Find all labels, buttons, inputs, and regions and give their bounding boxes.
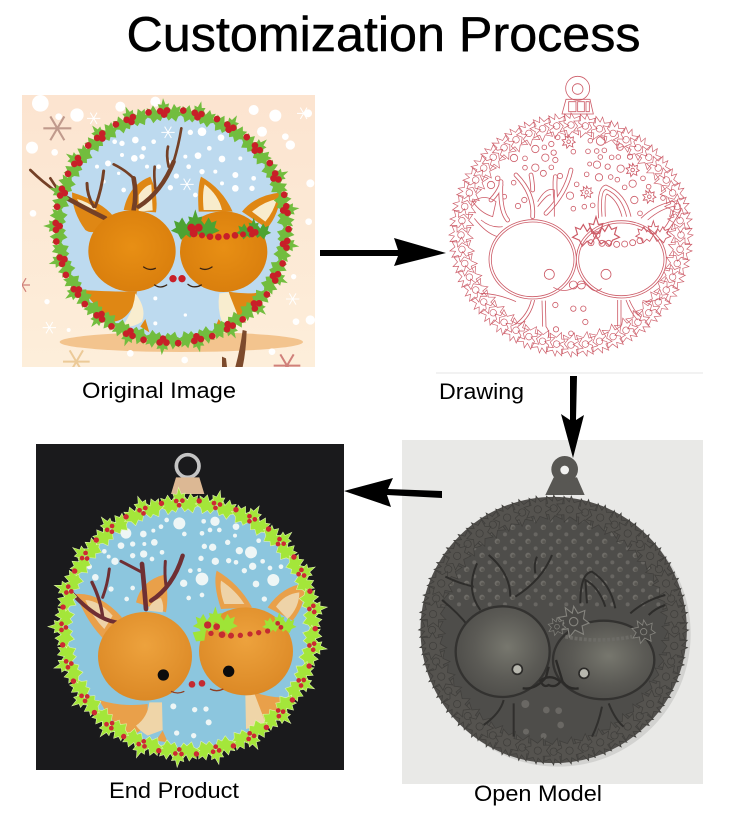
- right head: [553, 621, 654, 699]
- disc: [59, 113, 285, 340]
- cap and loop: [545, 456, 585, 495]
- lower body dots: [521, 700, 564, 739]
- left deer ears: [76, 575, 167, 638]
- snowflakes: [121, 517, 279, 586]
- snow dots: [26, 95, 315, 363]
- right deer ears: [215, 571, 305, 621]
- label: original image: Original Image: [82, 378, 236, 403]
- antlers: [73, 556, 183, 622]
- disc: [425, 502, 682, 758]
- shadow: [425, 501, 691, 767]
- left deer body: [99, 700, 168, 742]
- snowflake red: [14, 278, 300, 377]
- head wreath: [171, 209, 271, 240]
- noses: [169, 275, 186, 282]
- noses and smiles: [171, 680, 223, 693]
- title: Customization Process: [126, 8, 640, 62]
- legs: [484, 700, 624, 737]
- arrow: original to drawing: [320, 238, 446, 266]
- panel: drawing: [434, 76, 708, 372]
- snowflake decor: [43, 116, 71, 140]
- antlers: [491, 170, 571, 220]
- eyes: [512, 664, 589, 678]
- snowflakes: [43, 108, 310, 333]
- right deer ears: [198, 177, 281, 228]
- eyes: [158, 666, 234, 681]
- divider under drawing: [436, 372, 703, 374]
- beads: [565, 637, 632, 640]
- deer faces: [144, 267, 212, 287]
- head holly and beads: [193, 606, 297, 641]
- relief dots: [442, 519, 660, 606]
- label: open model: Open Model: [474, 781, 602, 806]
- wreath: [402, 478, 705, 782]
- ornament cap: [562, 76, 593, 114]
- noses: [523, 660, 579, 689]
- wreath ring: [48, 486, 330, 769]
- right deer body: [216, 292, 256, 324]
- label: drawing: Drawing: [439, 379, 524, 404]
- tail: [222, 330, 247, 367]
- wreath ring: [43, 97, 302, 357]
- arrow: drawing to open model: [561, 376, 584, 458]
- left head: [456, 606, 550, 697]
- noses: [553, 281, 602, 291]
- small flakes: [562, 135, 656, 203]
- panel: end product photo: [36, 444, 344, 770]
- left deer body: [84, 290, 149, 332]
- loop and cap: [171, 455, 204, 494]
- snow circles: [487, 135, 665, 336]
- disc: [60, 499, 317, 756]
- snowflake bottom: [63, 350, 90, 367]
- right deer head: [180, 211, 267, 292]
- deer heads: [489, 220, 666, 299]
- ground shadow: [60, 332, 303, 352]
- antlers and ears: [442, 555, 665, 627]
- left deer ears: [72, 177, 157, 232]
- panel: open model photo: [402, 440, 705, 784]
- left antlers: [30, 128, 181, 218]
- legs: [481, 293, 663, 338]
- left deer head: [88, 210, 176, 292]
- snow dots: [87, 517, 283, 738]
- left deer head: [98, 612, 192, 701]
- ears: [473, 185, 681, 237]
- wreath outline: [434, 98, 708, 372]
- right deer body: [245, 692, 282, 729]
- panel: original image: [14, 95, 315, 377]
- right deer head: [199, 607, 293, 695]
- label: end product: End Product: [109, 778, 239, 803]
- head holly: [548, 606, 655, 643]
- arrow: open model to end product: [344, 478, 442, 507]
- head holly and beads: [573, 217, 671, 247]
